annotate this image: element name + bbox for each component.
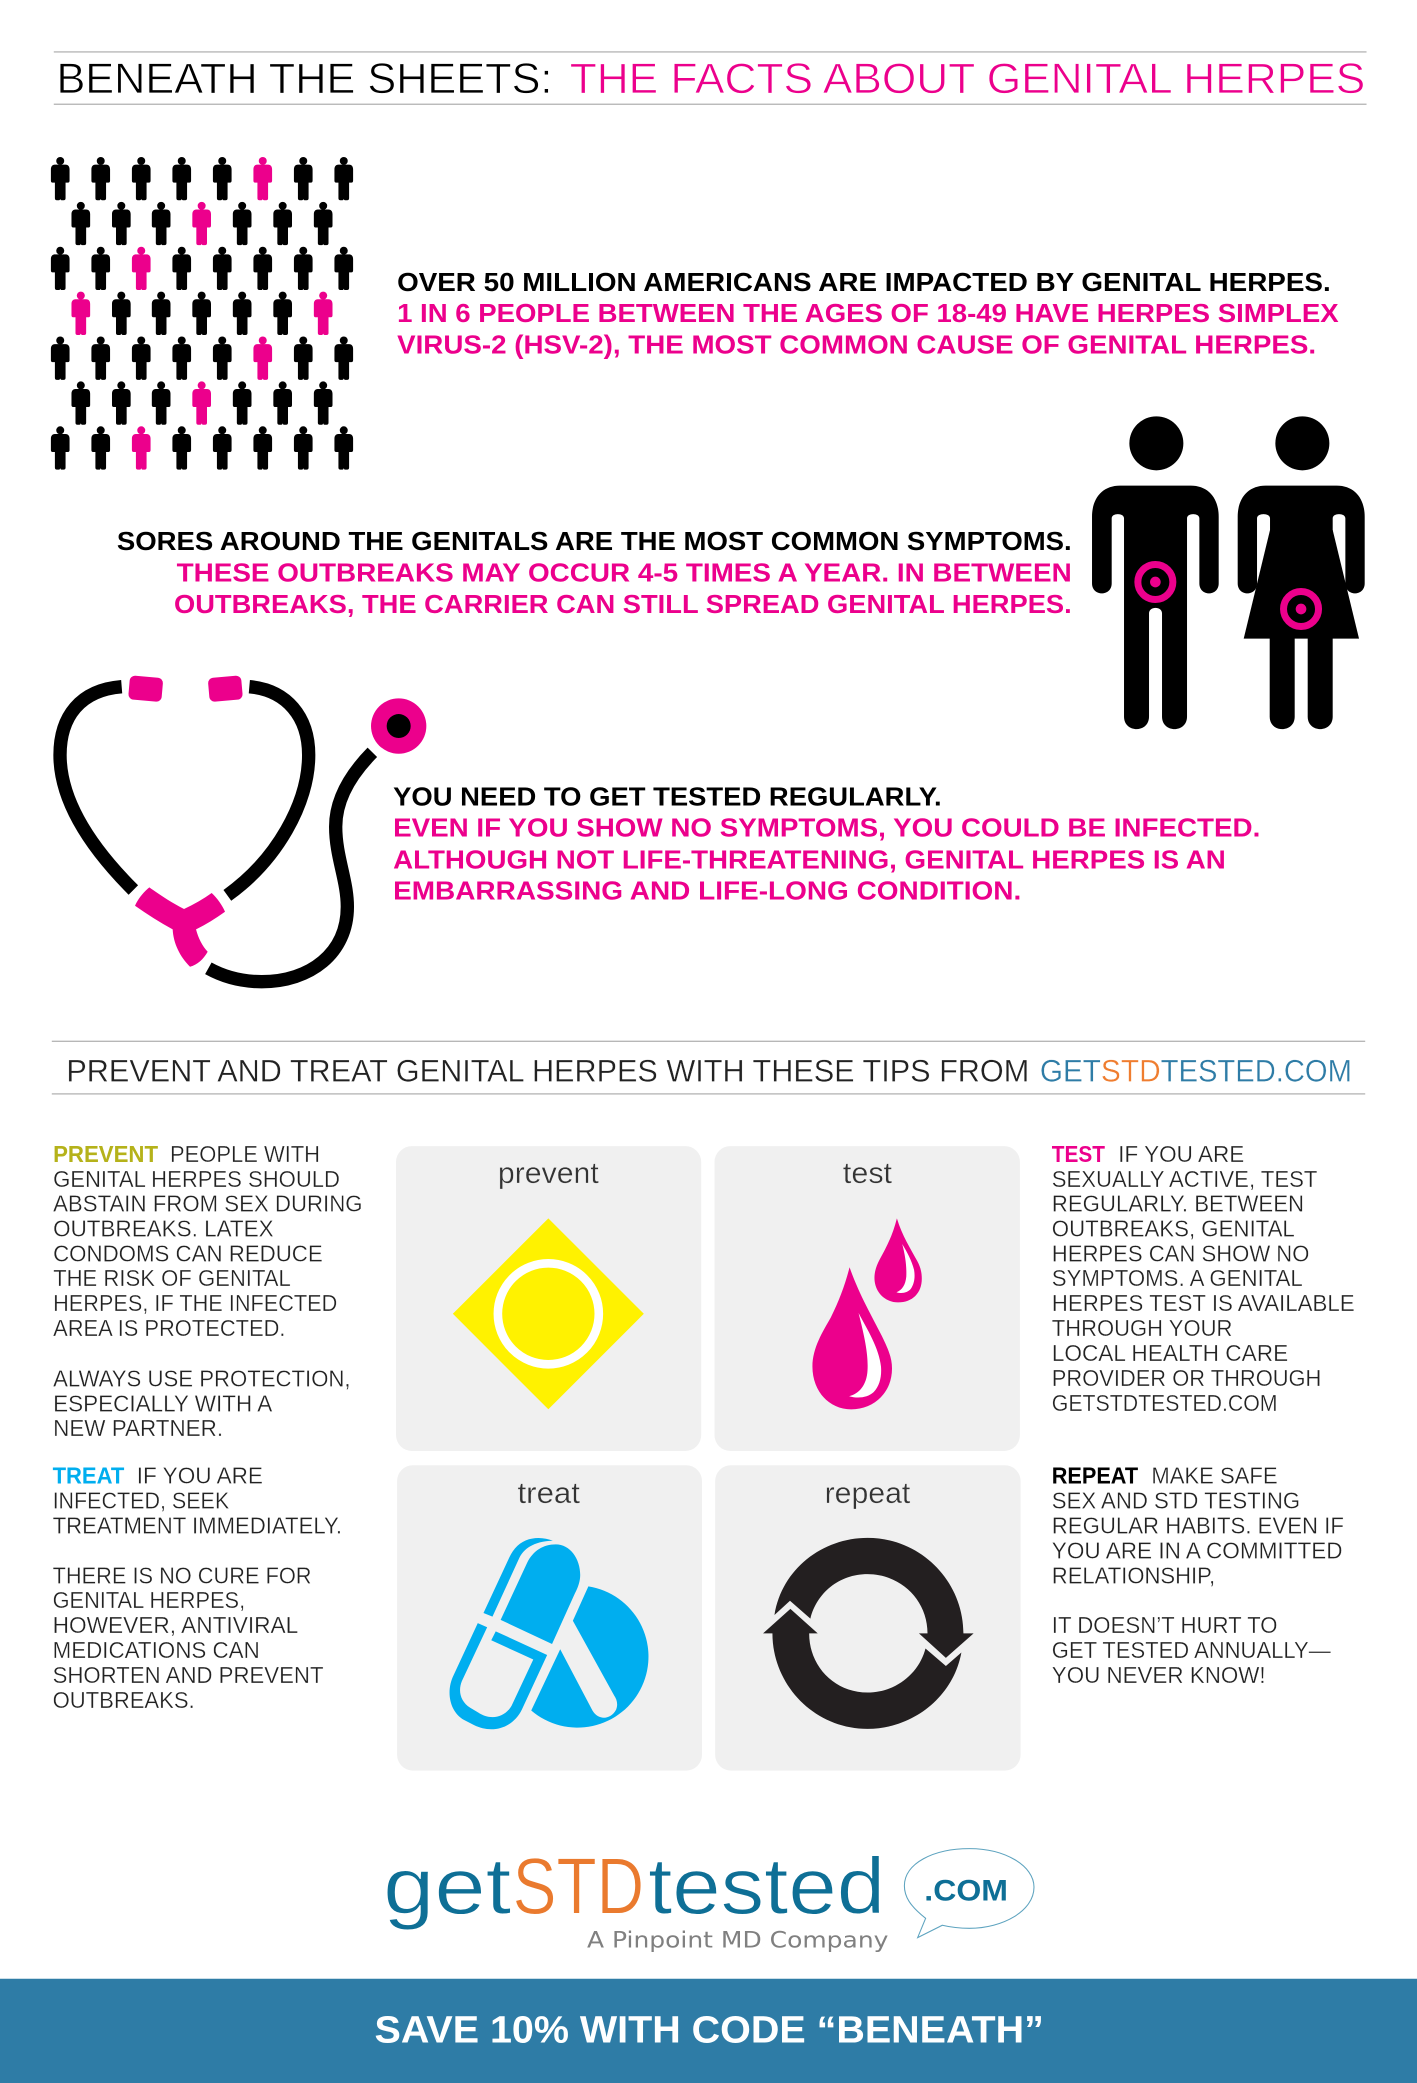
text block: repeat [1052, 1462, 1344, 1688]
icon: blood drops [812, 1218, 922, 1409]
text block: 50 million Americans: VIRUS-2 (HSV-2), THE MOST COMMON CAUSE OF GENITAL HERPES. [397, 331, 1316, 359]
icon: woman [1238, 416, 1365, 729]
text block: symptoms: THESE OUTBREAKS MAY OCCUR 4-5 TIMES A YEAR. IN BETWEEN [177, 560, 1072, 588]
panel: treat [397, 1465, 702, 1771]
text block: test: LOCAL HEALTH CARE [1052, 1340, 1288, 1366]
text block: prevent: GENITAL HERPES SHOULD [53, 1166, 340, 1192]
text block: treat: TREATMENT IMMEDIATELY. [53, 1512, 342, 1538]
section heading: tips: GET [1040, 1054, 1101, 1089]
section heading: tips: STD [1101, 1054, 1161, 1089]
text block: repeat: YOU NEVER KNOW! [1052, 1662, 1266, 1688]
logo: getSTDtested.com: STD [513, 1842, 644, 1931]
text block: get tested regularly: EMBARRASSING AND LIFE-LONG CONDITION. [393, 878, 1021, 906]
text block: treat: IF YOU ARE [137, 1462, 263, 1488]
section heading: tips: PREVENT AND TREAT GENITAL HERPES WITH THESE TIPS FROM [66, 1054, 1029, 1089]
text block: repeat: MAKE SAFE [1151, 1462, 1278, 1488]
icon: man and woman with targets [1092, 416, 1365, 729]
text block: test: GETSTDTESTED.COM [1052, 1390, 1278, 1416]
logo: getSTDtested.com: get [383, 1842, 511, 1931]
text block: symptoms [117, 528, 1072, 619]
title: BENEATH THE SHEETS: [56, 56, 552, 103]
text block: symptoms: OUTBREAKS, THE CARRIER CAN STILL SPREAD GENITAL HERPES. [174, 591, 1072, 619]
text block: repeat: REGULAR HABITS. EVEN IF [1052, 1512, 1344, 1538]
text block: treat: THERE IS NO CURE FOR [53, 1562, 312, 1588]
text block: 50 million Americans [397, 269, 1339, 359]
text block: prevent: HERPES, IF THE INFECTED [53, 1290, 337, 1316]
text block: prevent: OUTBREAKS. LATEX [53, 1216, 274, 1242]
logo: getSTDtested.com: tested [648, 1842, 885, 1931]
text block: prevent [53, 1141, 363, 1441]
text block: 50 million Americans: 1 IN 6 PEOPLE BETWEEN THE AGES OF 18-49 HAVE HERPES SIMPLEX [397, 300, 1339, 328]
text block: get tested regularly: YOU NEED TO GET TESTED REGULARLY. [393, 783, 942, 811]
text block: prevent: PREVENT [53, 1141, 158, 1167]
text block: test [1052, 1141, 1355, 1416]
text block: treat: HOWEVER, ANTIVIRAL [53, 1612, 298, 1638]
text block: treat: GENITAL HERPES, [53, 1587, 245, 1613]
footer banner [0, 1979, 1417, 2083]
logo: getSTDtested.com: A Pinpoint MD Company [587, 1928, 888, 1954]
text block: prevent: ESPECIALLY WITH A [53, 1390, 273, 1416]
panel: repeat: repeat [825, 1477, 911, 1510]
text block: repeat: REPEAT [1052, 1462, 1138, 1488]
text block: treat: OUTBREAKS. [53, 1687, 195, 1713]
text block: get tested regularly: ALTHOUGH NOT LIFE-THREATENING, GENITAL HERPES IS AN [393, 847, 1226, 875]
panel: prevent [396, 1146, 701, 1451]
panel: prevent: prevent [498, 1157, 600, 1190]
text block: test: HERPES TEST IS AVAILABLE [1052, 1290, 1355, 1316]
panel: test: test [843, 1157, 893, 1190]
text block: repeat: RELATIONSHIP, [1052, 1562, 1215, 1588]
text block: prevent: THE RISK OF GENITAL [53, 1265, 291, 1291]
text block: test: THROUGH YOUR [1052, 1315, 1232, 1341]
text block: 50 million Americans: OVER 50 MILLION AMERICANS ARE IMPACTED BY GENITAL HERPES. [397, 269, 1331, 297]
text block: test: OUTBREAKS, GENITAL [1052, 1216, 1295, 1242]
text block: symptoms: SORES AROUND THE GENITALS ARE THE MOST COMMON SYMPTOMS. [117, 528, 1072, 556]
logo: getSTDtested.com [383, 1842, 1034, 1954]
icon: cycle arrows [763, 1538, 974, 1729]
pictogram: 1 in 6 people grid [51, 157, 353, 470]
panel: test [714, 1146, 1020, 1451]
speech bubble [904, 1849, 1034, 1938]
icon: stethoscope [60, 675, 426, 982]
text block: treat: TREAT [53, 1462, 124, 1488]
text block: treat [53, 1462, 342, 1713]
text block: test: HERPES CAN SHOW NO [1052, 1240, 1309, 1266]
text block: prevent: CONDOMS CAN REDUCE [53, 1240, 323, 1266]
text block: test: TEST [1052, 1141, 1105, 1167]
text block: treat: INFECTED, SEEK [53, 1487, 229, 1513]
text block: treat: SHORTEN AND PREVENT [53, 1662, 324, 1688]
title [54, 51, 1367, 105]
text block: prevent: NEW PARTNER. [53, 1415, 223, 1441]
panel: treat: treat [518, 1477, 581, 1510]
footer banner: SAVE 10% WITH CODE “BENEATH” [375, 2009, 1044, 2051]
text block: test: SYMPTOMS. A GENITAL [1052, 1265, 1303, 1291]
text block: get tested regularly: EVEN IF YOU SHOW NO SYMPTOMS, YOU COULD BE INFECTED. [393, 815, 1260, 843]
icon: condom wrapper [453, 1218, 644, 1409]
logo: getSTDtested.com: .COM [924, 1875, 1008, 1907]
section heading: tips [52, 1041, 1365, 1095]
panel: repeat [715, 1465, 1021, 1771]
text block: repeat: GET TESTED ANNUALLY— [1052, 1637, 1331, 1663]
text block: get tested regularly [393, 783, 1260, 906]
text block: repeat: IT DOESN’T HURT TO [1052, 1612, 1278, 1638]
text block: prevent: ABSTAIN FROM SEX DURING [53, 1191, 363, 1217]
icon: man [1092, 416, 1219, 729]
icon: pills [450, 1538, 648, 1729]
text block: repeat: SEX AND STD TESTING [1052, 1487, 1300, 1513]
text block: test: PROVIDER OR THROUGH [1052, 1365, 1321, 1391]
text block: prevent: PEOPLE WITH [170, 1141, 320, 1167]
text block: treat: MEDICATIONS CAN [53, 1637, 260, 1663]
text block: test: REGULARLY. BETWEEN [1052, 1191, 1304, 1217]
text block: repeat: YOU ARE IN A COMMITTED [1052, 1537, 1343, 1563]
text block: test: SEXUALLY ACTIVE, TEST [1052, 1166, 1317, 1192]
title: THE FACTS ABOUT GENITAL HERPES [570, 56, 1365, 103]
text block: prevent: AREA IS PROTECTED. [53, 1315, 286, 1341]
text block: test: IF YOU ARE [1118, 1141, 1244, 1167]
text block: prevent: ALWAYS USE PROTECTION, [53, 1365, 351, 1391]
section heading: tips: TESTED.COM [1161, 1054, 1352, 1089]
